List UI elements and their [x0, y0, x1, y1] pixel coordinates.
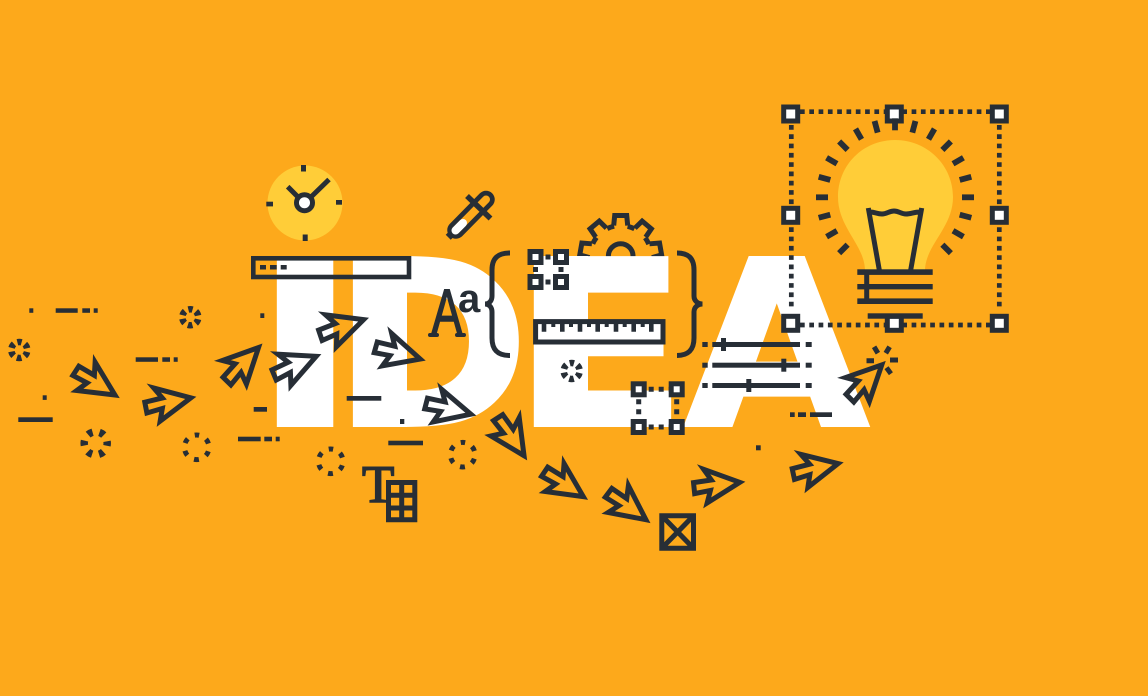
icon: small selection handles: [530, 252, 566, 288]
icon: ruler: [536, 322, 663, 342]
cursor arrow 4: [267, 341, 323, 390]
cursor arrow 13 with click sparks: [837, 347, 898, 409]
filament: [868, 208, 922, 270]
icon: search bar: [253, 258, 409, 277]
icon: text and table: [362, 456, 415, 520]
letter D: D: [333, 212, 529, 479]
letter A: A: [685, 213, 868, 479]
icon: text and table: T: [362, 456, 394, 514]
icon: eyedropper: [448, 196, 490, 238]
cursor arrow 8: [485, 408, 538, 465]
icon: gear: [580, 216, 662, 286]
dash accents: [18, 308, 832, 450]
headline word: IDEA: [254, 212, 868, 480]
icon: font size Aa: a: [458, 277, 481, 321]
icon: light bulb with selection frame: [784, 107, 1006, 330]
cursor arrow 10: [599, 479, 656, 533]
icon: font size Aa: A: [432, 277, 463, 348]
cursor arrow 9: [536, 457, 593, 511]
cursor arrow 6: [371, 330, 425, 375]
bulb base: [857, 269, 933, 319]
cursor arrow 1: [67, 356, 124, 409]
cursor arrow 11: [692, 466, 742, 504]
cursor arrow 2: [142, 381, 194, 423]
cursor arrow 3: [214, 336, 271, 392]
selection frame: [784, 107, 1006, 330]
right curly brace: [677, 253, 702, 356]
letter E: E: [512, 213, 688, 480]
bulb glass: [838, 140, 953, 271]
icon: crossed box: [662, 516, 694, 548]
light rays: [816, 118, 974, 253]
cursor arrow 7: [422, 386, 475, 431]
icon: font size Aa: [428, 277, 481, 348]
cursor arrow 12: [790, 447, 842, 490]
icon: selection frame on E: [633, 384, 682, 432]
letter I: I: [254, 212, 356, 479]
decorative spark on E: [564, 363, 580, 379]
spark rings: [11, 309, 475, 474]
left curly brace: [485, 253, 510, 356]
icon: clock: [266, 165, 342, 241]
icon: sliders: [702, 338, 812, 392]
cursor arrow 5: [315, 304, 369, 350]
cursor trail arrows: [67, 304, 898, 533]
